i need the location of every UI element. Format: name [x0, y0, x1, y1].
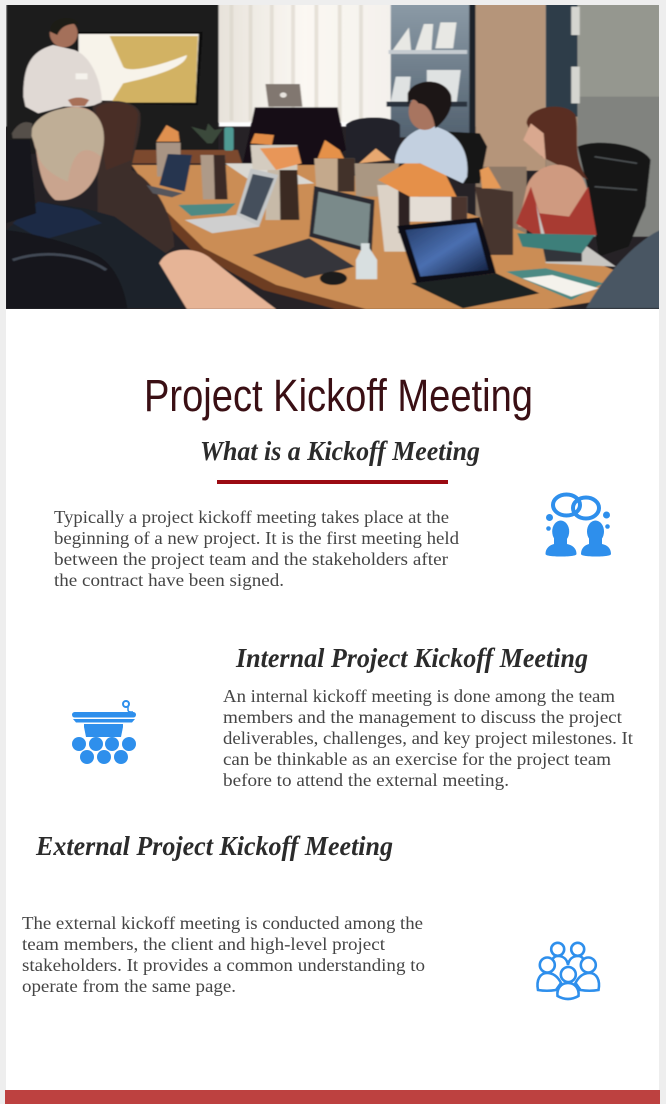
icon: meeting table with seated people — [72, 701, 136, 764]
text block: internal meeting: members and the management to discuss the project — [223, 707, 622, 727]
woman right — [527, 107, 588, 180]
text block: what is a kickoff meeting: Typically a project kickoff meeting takes place at the — [54, 507, 449, 527]
text block: external meeting: The external kickoff meeting is conducted among the — [22, 913, 423, 933]
chair — [345, 116, 401, 138]
text block: external meeting: operate from the same page. — [22, 976, 236, 996]
laptops — [159, 154, 192, 192]
text block: external meeting: stakeholders. It provides a common understanding to — [22, 955, 425, 975]
text block: what is a kickoff meeting: beginning of a new project. It is the first meeting held — [54, 528, 459, 548]
text block: what is a kickoff meeting: the contract have been signed. — [54, 570, 284, 590]
photo: team meeting around a conference table — [0, 4, 666, 317]
folders — [178, 203, 236, 216]
presenter — [23, 45, 102, 113]
woman back — [93, 101, 174, 263]
text block: internal meeting: An internal kickoff meeting is done among the team — [223, 686, 615, 706]
screen — [76, 32, 203, 105]
text block: external meeting — [22, 913, 425, 996]
text block: internal meeting: before to attend the external meeting. — [223, 770, 509, 790]
title: Project Kickoff Meeting — [144, 370, 533, 421]
text block: what is a kickoff meeting — [54, 507, 459, 590]
text block: internal meeting: deliverables, challenges, and key project milestones. It — [223, 728, 633, 748]
gift bags — [156, 143, 180, 177]
footer bar — [5, 1090, 660, 1104]
text block: internal meeting: can be thinkable as an exercise for the project team — [223, 749, 611, 769]
heading: external project kickoff meeting: External Project Kickoff Meeting — [35, 831, 393, 861]
man in blue shirt — [395, 126, 468, 183]
blond man — [6, 202, 183, 308]
heading underline — [217, 480, 448, 484]
desk + laptop — [242, 107, 346, 167]
text block: internal meeting — [223, 686, 633, 790]
heading: what is a kickoff meeting: What is a Kickoff Meeting — [200, 436, 480, 466]
black chair front — [6, 230, 127, 308]
arm — [159, 250, 276, 309]
shelves — [393, 22, 457, 50]
icon: group of people — [537, 943, 599, 999]
plant & bottle — [191, 123, 223, 143]
person lower right — [586, 230, 660, 308]
table — [132, 165, 614, 309]
text block: external meeting: team members, the client and high-level project — [22, 934, 385, 954]
text block: what is a kickoff meeting: between the project team and the stakeholders after — [54, 549, 448, 569]
heading: internal project kickoff meeting: Internal Project Kickoff Meeting — [235, 643, 588, 673]
icon: two people talking — [546, 494, 611, 556]
